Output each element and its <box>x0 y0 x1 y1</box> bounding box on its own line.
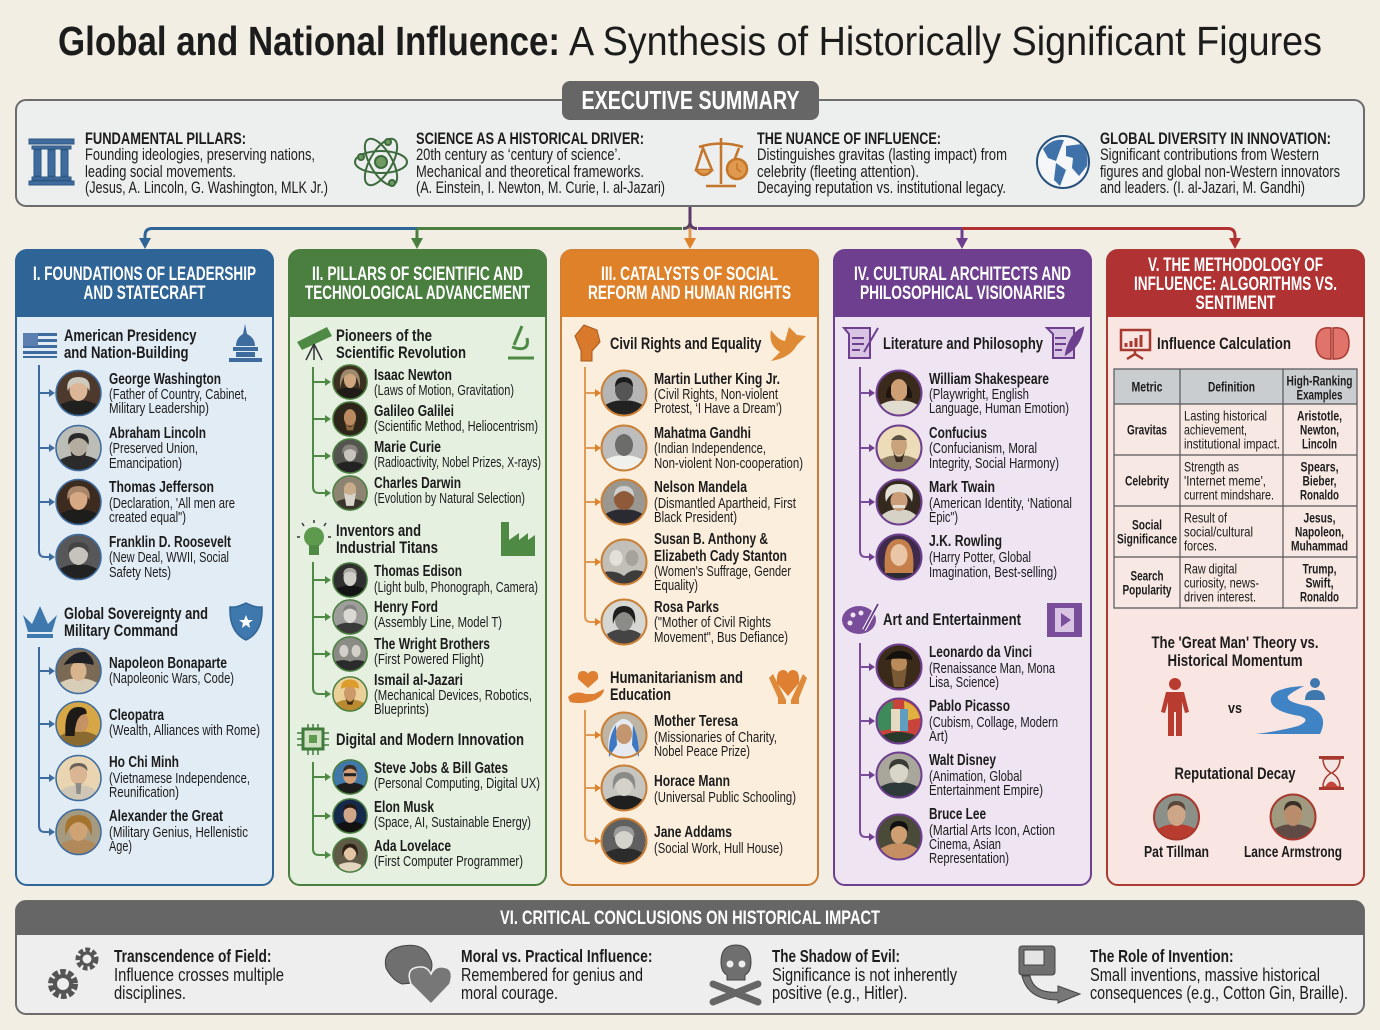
heading: pioneers of the scientific revolution: Scientific Revolution <box>336 343 466 362</box>
text: the nuance of influence: THE NUANCE OF INFLUENCE: <box>757 130 941 148</box>
tree connector: global sovereignty <box>39 647 55 836</box>
text: the shadow of evil: The Shadow of Evil: <box>772 946 900 966</box>
person: Mark Twain <box>876 479 1072 526</box>
table: influence metrics: Trump, <box>1302 562 1336 576</box>
table: influence metrics: Definition <box>1208 380 1255 394</box>
panel II: pillars of scientific and technological advancement <box>289 250 546 885</box>
tree connector: american presidency <box>39 365 55 561</box>
text: global diversity in innovation <box>1100 130 1340 197</box>
text: transcendence of field: Influence crosses multiple <box>114 965 284 985</box>
panel IV header <box>834 250 1091 317</box>
panel III: catalysts of social reform and human rights <box>561 250 818 885</box>
table: influence metrics: Lincoln <box>1302 436 1337 452</box>
person: Thomas Jefferson: (Declaration, 'All men are <box>109 496 235 512</box>
table: influence metrics <box>1114 369 1357 608</box>
person: William Shakespeare: Language, Human Emotion) <box>929 401 1069 417</box>
title <box>58 18 1322 64</box>
icon: crown <box>23 606 57 638</box>
person: Thomas Jefferson <box>56 479 235 526</box>
heading: inventors and industrial titans <box>336 521 438 557</box>
person: Ada Lovelace: (First Computer Programmer) <box>374 854 523 870</box>
person: Confucius: Integrity, Social Harmony) <box>929 456 1059 472</box>
person: Mother Teresa: (Missionaries of Charity, <box>654 730 777 746</box>
panel VI header: VI. CRITICAL CONCLUSIONS ON HISTORICAL IMPACT <box>500 908 880 929</box>
person: Franklin D. Roosevelt: Franklin D. Roosevelt <box>109 534 231 551</box>
person: Martin Luther King Jr.: (Civil Rights, Non-violent <box>654 387 778 403</box>
heading: inventors and industrial titans: Inventors and <box>336 521 421 540</box>
person: J.K. Rowling: Imagination, Best-selling) <box>929 565 1057 581</box>
panel I header: AND STATECRAFT <box>84 283 206 304</box>
person: Thomas Edison <box>333 563 538 597</box>
title: A Synthesis of Historically Significant Figures <box>569 18 1322 64</box>
person: Mark Twain: (American Identity, ‘National <box>929 496 1072 512</box>
person: Mother Teresa <box>602 712 777 760</box>
table: influence metrics: Jesus, <box>1304 510 1336 526</box>
person: Susan B. Anthony and Elizabeth Cady Stanton <box>602 531 791 594</box>
text: science as a historical driver <box>416 130 665 197</box>
person: The Wright Brothers: (First Powered Flight) <box>374 652 484 668</box>
person: Confucius: (Confucianism, Moral <box>929 441 1037 457</box>
panel V header: SENTIMENT <box>1196 293 1276 314</box>
person: Horace Mann <box>602 766 796 811</box>
heading: influence calculation: Influence Calculation <box>1157 334 1291 353</box>
person: Walt Disney: (Animation, Global <box>929 769 1022 785</box>
person: Martin Luther King Jr. <box>602 370 782 417</box>
person: Rosa Parks: Rosa Parks <box>654 599 719 616</box>
table: influence metrics: Popularity <box>1122 582 1172 598</box>
table: influence metrics: Raw digital <box>1184 560 1237 576</box>
person: Elon Musk: (Space, AI, Sustainable Energy) <box>374 815 531 831</box>
person: Rosa Parks: ("Mother of Civil Rights <box>654 615 771 631</box>
text: transcendence of field <box>114 946 284 1003</box>
person: Isaac Newton <box>333 365 514 399</box>
person: Susan B. Anthony and Elizabeth Cady Stanton: Elizabeth Cady Stanton <box>654 548 787 565</box>
heading: great man theory: The 'Great Man' Theory vs. <box>1152 633 1318 652</box>
person: Pablo Picasso: Art) <box>929 729 948 745</box>
heading: global sovereignty: Global Sovereignty and <box>64 604 208 623</box>
table: influence metrics: Napoleon, <box>1295 524 1344 540</box>
heading: civil rights and equality: Civil Rights and Equality <box>610 334 762 353</box>
heading: pioneers of the scientific revolution <box>336 326 466 362</box>
person: Leonardo da Vinci: Lisa, Science) <box>929 675 999 691</box>
icon: single person <box>1161 678 1189 736</box>
person: Cleopatra <box>56 702 260 747</box>
person: Abraham Lincoln: (Preserved Union, <box>109 441 198 457</box>
table: influence metrics: Metric <box>1132 380 1163 394</box>
table: influence metrics: Bieber, <box>1302 474 1336 488</box>
icon: skull and crossbones <box>713 945 758 1002</box>
title: Global and National Influence: <box>58 18 560 64</box>
person: Napoleon Bonaparte: Napoleon Bonaparte <box>109 655 227 672</box>
person: Mahatma Gandhi <box>602 425 803 472</box>
person: Bruce Lee: Cinema, Asian <box>929 837 1001 853</box>
table: influence metrics: Ronaldo <box>1300 590 1339 604</box>
person: Jane Addams: (Social Work, Hull House) <box>654 841 783 857</box>
person: Charles Darwin: Charles Darwin <box>374 475 461 492</box>
person: Bruce Lee: Bruce Lee <box>929 806 986 823</box>
icon: brain and heart <box>385 945 451 1004</box>
text: fundamental pillars: leading social movements. <box>85 163 236 181</box>
icon: microchip <box>297 724 329 755</box>
icon: hands with heart <box>769 670 807 704</box>
person: Confucius: Confucius <box>929 425 987 442</box>
person: Pat Tillman <box>1144 794 1209 861</box>
person: Abraham Lincoln: Emancipation) <box>109 456 182 472</box>
person: Thomas Edison: (Light bulb, Phonograph, Camera) <box>374 580 538 596</box>
text: fundamental pillars: (Jesus, A. Lincoln, G. Washington, MLK Jr.) <box>85 179 328 197</box>
person: Isaac Newton: Isaac Newton <box>374 367 452 384</box>
text: global diversity in innovation: Significant contributions from Western <box>1100 146 1319 164</box>
person: Jane Addams: Jane Addams <box>654 824 732 841</box>
table: influence metrics: Social <box>1132 518 1162 532</box>
text: the nuance of influence: celebrity (fleeting attention). <box>757 163 919 181</box>
heading: global sovereignty <box>64 604 208 640</box>
panel II header <box>289 250 546 317</box>
icon: scroll and quill <box>844 328 878 358</box>
table: influence metrics: Search <box>1130 568 1164 584</box>
person: Pablo Picasso: Pablo Picasso <box>929 698 1010 715</box>
panel: executive summary <box>16 81 1364 206</box>
table: influence metrics: Spears, <box>1300 460 1338 474</box>
table: influence metrics: Ronaldo <box>1300 488 1339 502</box>
person: Ismail al-Jazari: (Mechanical Devices, Robotics, <box>374 688 532 704</box>
text: the shadow of evil <box>772 946 957 1003</box>
person: Leonardo da Vinci: (Renaissance Man, Mona <box>929 661 1056 677</box>
person: Elon Musk <box>333 799 531 833</box>
panel III header: III. CATALYSTS OF SOCIAL <box>601 264 778 285</box>
text: science as a historical driver: Mechanical and theoretical frameworks. <box>416 163 644 181</box>
person: Franklin D. Roosevelt: (New Deal, WWII, Social <box>109 550 229 566</box>
text: moral vs practical influence: moral courage. <box>461 983 558 1003</box>
icon: telescope <box>297 327 332 360</box>
icon: hand holding heart <box>568 671 604 703</box>
person: Horace Mann: Horace Mann <box>654 773 730 790</box>
text: fundamental pillars: Founding ideologies, preserving nations, <box>85 146 315 164</box>
person: Franklin D. Roosevelt <box>56 534 231 581</box>
icon: factory <box>501 522 535 556</box>
person: Cleopatra: (Wealth, Alliances with Rome) <box>109 723 260 739</box>
person: Rosa Parks <box>602 599 788 646</box>
person: Henry Ford: Henry Ford <box>374 599 438 616</box>
person: Horace Mann: (Universal Public Schooling) <box>654 790 796 806</box>
table: influence metrics: Gravitas <box>1127 422 1167 438</box>
person: Mahatma Gandhi: Mahatma Gandhi <box>654 425 751 442</box>
table: influence metrics: curiosity, news- <box>1184 574 1259 590</box>
person: Susan B. Anthony and Elizabeth Cady Stanton: Equality) <box>654 578 698 594</box>
person: Ismail al-Jazari: Ismail al-Jazari <box>374 672 463 689</box>
person: Charles Darwin: (Evolution by Natural Selection) <box>374 491 525 507</box>
table: influence metrics: forces. <box>1184 538 1217 554</box>
connectors from executive summary to panels <box>139 206 1241 249</box>
person: Mahatma Gandhi: (Indian Independence, <box>654 441 766 457</box>
icon: hourglass <box>1319 756 1344 790</box>
text: the role of invention: The Role of Invention: <box>1090 946 1234 966</box>
person: Nelson Mandela: Nelson Mandela <box>654 479 747 496</box>
person: Nelson Mandela <box>602 479 796 526</box>
heading: global sovereignty: Military Command <box>64 621 178 640</box>
person: Ho Chi Minh: Ho Chi Minh <box>109 754 179 771</box>
person: Steve Jobs and Bill Gates: Steve Jobs & Bill Gates <box>374 760 508 777</box>
person: Walt Disney: Walt Disney <box>929 752 996 769</box>
person: Mark Twain: Epic") <box>929 510 958 526</box>
heading: humanitarianism and education: Humanitarianism and <box>610 668 743 687</box>
person: Napoleon Bonaparte <box>56 648 234 694</box>
person: Lance Armstrong <box>1244 794 1342 861</box>
icon: globe <box>1037 136 1089 188</box>
person: Bruce Lee: (Martial Arts Icon, Action <box>929 823 1055 839</box>
text: the nuance of influence <box>757 130 1007 197</box>
panel I: foundations of leadership and statecraft <box>16 250 273 885</box>
person: J.K. Rowling: J.K. Rowling <box>929 533 1002 550</box>
icon: scale and clock <box>696 138 747 186</box>
heading: great man theory <box>1152 633 1318 670</box>
person: Ada Lovelace: Ada Lovelace <box>374 838 451 855</box>
panel IV header: IV. CULTURAL ARCHITECTS AND <box>854 264 1071 285</box>
icon: device with arrow <box>1019 946 1080 1003</box>
person: Henry Ford: (Assembly Line, Model T) <box>374 615 502 631</box>
person: Galileo Galilei: (Scientific Method, Heliocentrism) <box>374 419 538 435</box>
person: Ho Chi Minh <box>56 754 250 801</box>
icon: microscope <box>508 326 534 358</box>
text: moral vs practical influence: Remembered for genius and <box>461 965 643 985</box>
text: the shadow of evil: positive (e.g., Hitler). <box>772 983 908 1003</box>
table: influence metrics: current mindshare. <box>1184 486 1274 502</box>
text: the shadow of evil: Significance is not inherently <box>772 965 957 985</box>
heading: inventors and industrial titans: Industrial Titans <box>336 538 438 557</box>
heading: american presidency: American Presidency <box>64 326 197 345</box>
table: influence metrics: Examples <box>1296 388 1342 402</box>
person: Lance Armstrong: Lance Armstrong <box>1244 844 1342 861</box>
person: William Shakespeare: (Playwright, English <box>929 387 1029 403</box>
tree connector: inventors <box>313 562 331 698</box>
tree connector: pioneers <box>313 367 331 497</box>
heading: humanitarianism and education <box>610 668 743 704</box>
text: science as a historical driver: 20th century as ‘century of science’. <box>416 146 621 164</box>
person: Walt Disney <box>876 752 1043 799</box>
panel I header <box>16 250 273 317</box>
person: Cleopatra: Cleopatra <box>109 707 164 724</box>
icon: paint palette <box>842 604 878 634</box>
table: influence metrics: Celebrity <box>1125 474 1169 488</box>
panel II header: TECHNOLOGICAL ADVANCEMENT <box>305 283 530 304</box>
table: influence metrics: Significance <box>1117 532 1177 546</box>
person: Marie Curie <box>333 439 541 473</box>
panel III header: REFORM AND HUMAN RIGHTS <box>588 283 791 304</box>
icon: capitol building <box>229 324 262 362</box>
person: Susan B. Anthony and Elizabeth Cady Stanton: (Women's Suffrage, Gender <box>654 564 791 580</box>
person: Pablo Picasso: (Cubism, Collage, Modern <box>929 715 1058 731</box>
person: Pat Tillman: Pat Tillman <box>1144 844 1209 861</box>
text: the role of invention: Small inventions, massive historical <box>1090 965 1320 985</box>
icon: raised fist <box>575 325 600 361</box>
table: influence metrics: High-Ranking <box>1286 374 1352 388</box>
person: Pablo Picasso <box>876 698 1058 745</box>
tree connector: humanitarianism <box>585 710 601 845</box>
person: Elon Musk: Elon Musk <box>374 799 434 816</box>
table: influence metrics: Swift, <box>1306 576 1334 590</box>
table: influence metrics: Lasting historical <box>1184 408 1267 424</box>
person: Rosa Parks: Movement", Bus Defiance) <box>654 630 788 646</box>
person: Bruce Lee <box>876 806 1055 867</box>
person: Jane Addams <box>602 818 783 864</box>
panel II header: II. PILLARS OF SCIENTIFIC AND <box>312 264 523 285</box>
icon: atom <box>355 134 407 190</box>
heading: literature and philosophy: Literature and Philosophy <box>883 334 1043 353</box>
person: Martin Luther King Jr.: Martin Luther King Jr. <box>654 371 780 388</box>
panel VI: critical conclusions <box>16 901 1364 1014</box>
person: Susan B. Anthony and Elizabeth Cady Stanton: Susan B. Anthony & <box>654 531 768 548</box>
text: science as a historical driver: (A. Einstein, I. Newton, M. Curie, I. al-Jazari) <box>416 179 665 197</box>
panel V header <box>1107 250 1364 317</box>
text: transcendence of field: Transcendence of Field: <box>114 946 272 966</box>
person: Ho Chi Minh: (Vietnamese Independence, <box>109 771 250 787</box>
panel I header: I. FOUNDATIONS OF LEADERSHIP <box>33 264 256 285</box>
person: The Wright Brothers <box>333 636 490 671</box>
person: Franklin D. Roosevelt: Safety Nets) <box>109 565 171 581</box>
tree connector: art <box>860 643 875 841</box>
person: Galileo Galilei <box>333 402 538 436</box>
table: influence metrics: 'Internet meme', <box>1184 472 1266 488</box>
heading: pioneers of the scientific revolution: Pioneers of the <box>336 326 432 345</box>
person: William Shakespeare <box>876 370 1069 417</box>
person: Leonardo da Vinci: Leonardo da Vinci <box>929 644 1032 661</box>
icon: scroll with quill <box>1047 328 1083 358</box>
icon: pillars <box>29 139 74 185</box>
person: Thomas Edison: Thomas Edison <box>374 563 462 580</box>
table: influence metrics: Result of <box>1184 510 1227 526</box>
icon: american flag <box>23 333 57 358</box>
person: Alexander the Great: (Military Genius, Hellenistic <box>109 825 248 841</box>
person: Steve Jobs and Bill Gates <box>333 760 540 794</box>
person: J.K. Rowling: (Harry Potter, Global <box>929 550 1031 566</box>
person: Charles Darwin <box>333 475 525 510</box>
person: Alexander the Great: Age) <box>109 839 132 855</box>
icon: light bulb <box>297 520 331 555</box>
icon: shield with star <box>230 603 262 640</box>
person: Isaac Newton: (Laws of Motion, Gravitation) <box>374 383 514 399</box>
text: global diversity in innovation: and leaders. (I. al-Jazari, M. Gandhi) <box>1100 179 1305 197</box>
panel IV: cultural architects and philosophical visionaries <box>834 250 1091 885</box>
text: the role of invention <box>1090 946 1348 1003</box>
person: Steve Jobs and Bill Gates: (Personal Computing, Digital UX) <box>374 776 540 792</box>
person: Alexander the Great <box>56 808 248 855</box>
person: Alexander the Great: Alexander the Great <box>109 808 223 825</box>
table: influence metrics: social/cultural <box>1184 524 1253 540</box>
person: George Washington: (Father of Country, Cabinet, <box>109 387 247 403</box>
text: the nuance of influence: Decaying reputation vs. institutional legacy. <box>757 179 1006 197</box>
heading: humanitarianism and education: Education <box>610 685 671 704</box>
person: Nelson Mandela: (Dismantled Apartheid, First <box>654 496 796 512</box>
tree connector: civil rights <box>585 367 601 626</box>
heading: reputational decay: Reputational Decay <box>1174 764 1296 783</box>
person: Mother Teresa: Nobel Peace Prize) <box>654 744 750 760</box>
panel VI header <box>16 901 1364 935</box>
table: influence metrics: achievement, <box>1184 422 1247 438</box>
text: moral vs practical influence: Moral vs. Practical Influence: <box>461 946 652 966</box>
person: Leonardo da Vinci <box>876 644 1056 691</box>
table: influence metrics: Newton, <box>1300 422 1339 438</box>
panel III header <box>561 250 818 317</box>
person: Nelson Mandela: Black President) <box>654 510 737 526</box>
person: Mother Teresa: Mother Teresa <box>654 713 738 730</box>
person: Abraham Lincoln <box>56 425 206 472</box>
icon: brain <box>1316 328 1349 359</box>
person: Mark Twain: Mark Twain <box>929 479 995 496</box>
table: influence metrics: driven interest. <box>1184 588 1256 604</box>
heading: american presidency: and Nation-Building <box>64 343 188 362</box>
person: Ho Chi Minh: Reunification) <box>109 785 179 801</box>
heading: art and entertainment: Art and Entertainment <box>883 610 1021 629</box>
heading: american presidency <box>64 326 197 362</box>
icon: dove <box>770 327 806 361</box>
person: William Shakespeare: William Shakespeare <box>929 371 1049 388</box>
icon: presentation chart <box>1121 330 1150 359</box>
panel IV header: PHILOSOPHICAL VISIONARIES <box>860 283 1065 304</box>
person: Napoleon Bonaparte: (Napoleonic Wars, Code) <box>109 671 234 687</box>
person: Marie Curie: (Radioactivity, Nobel Prizes, X-rays) <box>374 455 541 471</box>
table: influence metrics: Aristotle, <box>1297 408 1342 424</box>
person: Thomas Jefferson: Thomas Jefferson <box>109 479 214 496</box>
heading tab: executive summary: EXECUTIVE SUMMARY <box>582 85 800 115</box>
person: Ismail al-Jazari <box>333 672 532 718</box>
tree connector: literature <box>860 367 875 561</box>
table: influence metrics: Strength as <box>1184 458 1239 474</box>
person: Ada Lovelace <box>333 838 523 872</box>
icon: film strip with play <box>1047 603 1082 637</box>
tree connector: digital <box>313 762 331 859</box>
icon: gears <box>52 951 95 995</box>
person: Confucius <box>876 425 1059 472</box>
person: George Washington: Military Leadership) <box>109 401 209 417</box>
heading: great man theory: Historical Momentum <box>1168 651 1302 670</box>
heading: digital and modern innovation: Digital and Modern Innovation <box>336 730 524 749</box>
person: The Wright Brothers: The Wright Brothers <box>374 636 490 653</box>
person: Galileo Galilei: Galileo Galilei <box>374 403 454 420</box>
panel V: the methodology of influence <box>1107 250 1364 885</box>
table: influence metrics: Muhammad <box>1291 538 1348 554</box>
text: the nuance of influence: Distinguishes gravitas (lasting impact) from <box>757 146 1007 164</box>
person: Walt Disney: Entertainment Empire) <box>929 783 1043 799</box>
person: George Washington <box>56 370 247 417</box>
person: Henry Ford <box>333 599 502 634</box>
table: influence metrics: institutional impact. <box>1184 436 1280 452</box>
text: fundamental pillars: FUNDAMENTAL PILLARS: <box>85 130 246 148</box>
icon: river and figure <box>1256 678 1325 734</box>
person: George Washington: George Washington <box>109 371 221 388</box>
text: science as a historical driver: SCIENCE AS A HISTORICAL DRIVER: <box>416 130 644 148</box>
person: Marie Curie: Marie Curie <box>374 439 441 456</box>
person: J.K. Rowling <box>876 533 1057 581</box>
text: transcendence of field: disciplines. <box>114 983 186 1003</box>
person: Ismail al-Jazari: Blueprints) <box>374 702 429 718</box>
label: vs: vs <box>1228 700 1242 717</box>
person: Martin Luther King Jr.: Protest, ‘I Have a Dream’) <box>654 401 782 417</box>
text: moral vs practical influence <box>461 946 652 1003</box>
person: Abraham Lincoln: Abraham Lincoln <box>109 425 206 442</box>
heading tab: executive summary <box>562 81 819 120</box>
person: Thomas Jefferson: created equal") <box>109 510 186 526</box>
text: fundamental pillars <box>85 130 328 197</box>
person: Bruce Lee: Representation) <box>929 851 1009 867</box>
person: Mahatma Gandhi: Non-violent Non-cooperation) <box>654 456 803 472</box>
